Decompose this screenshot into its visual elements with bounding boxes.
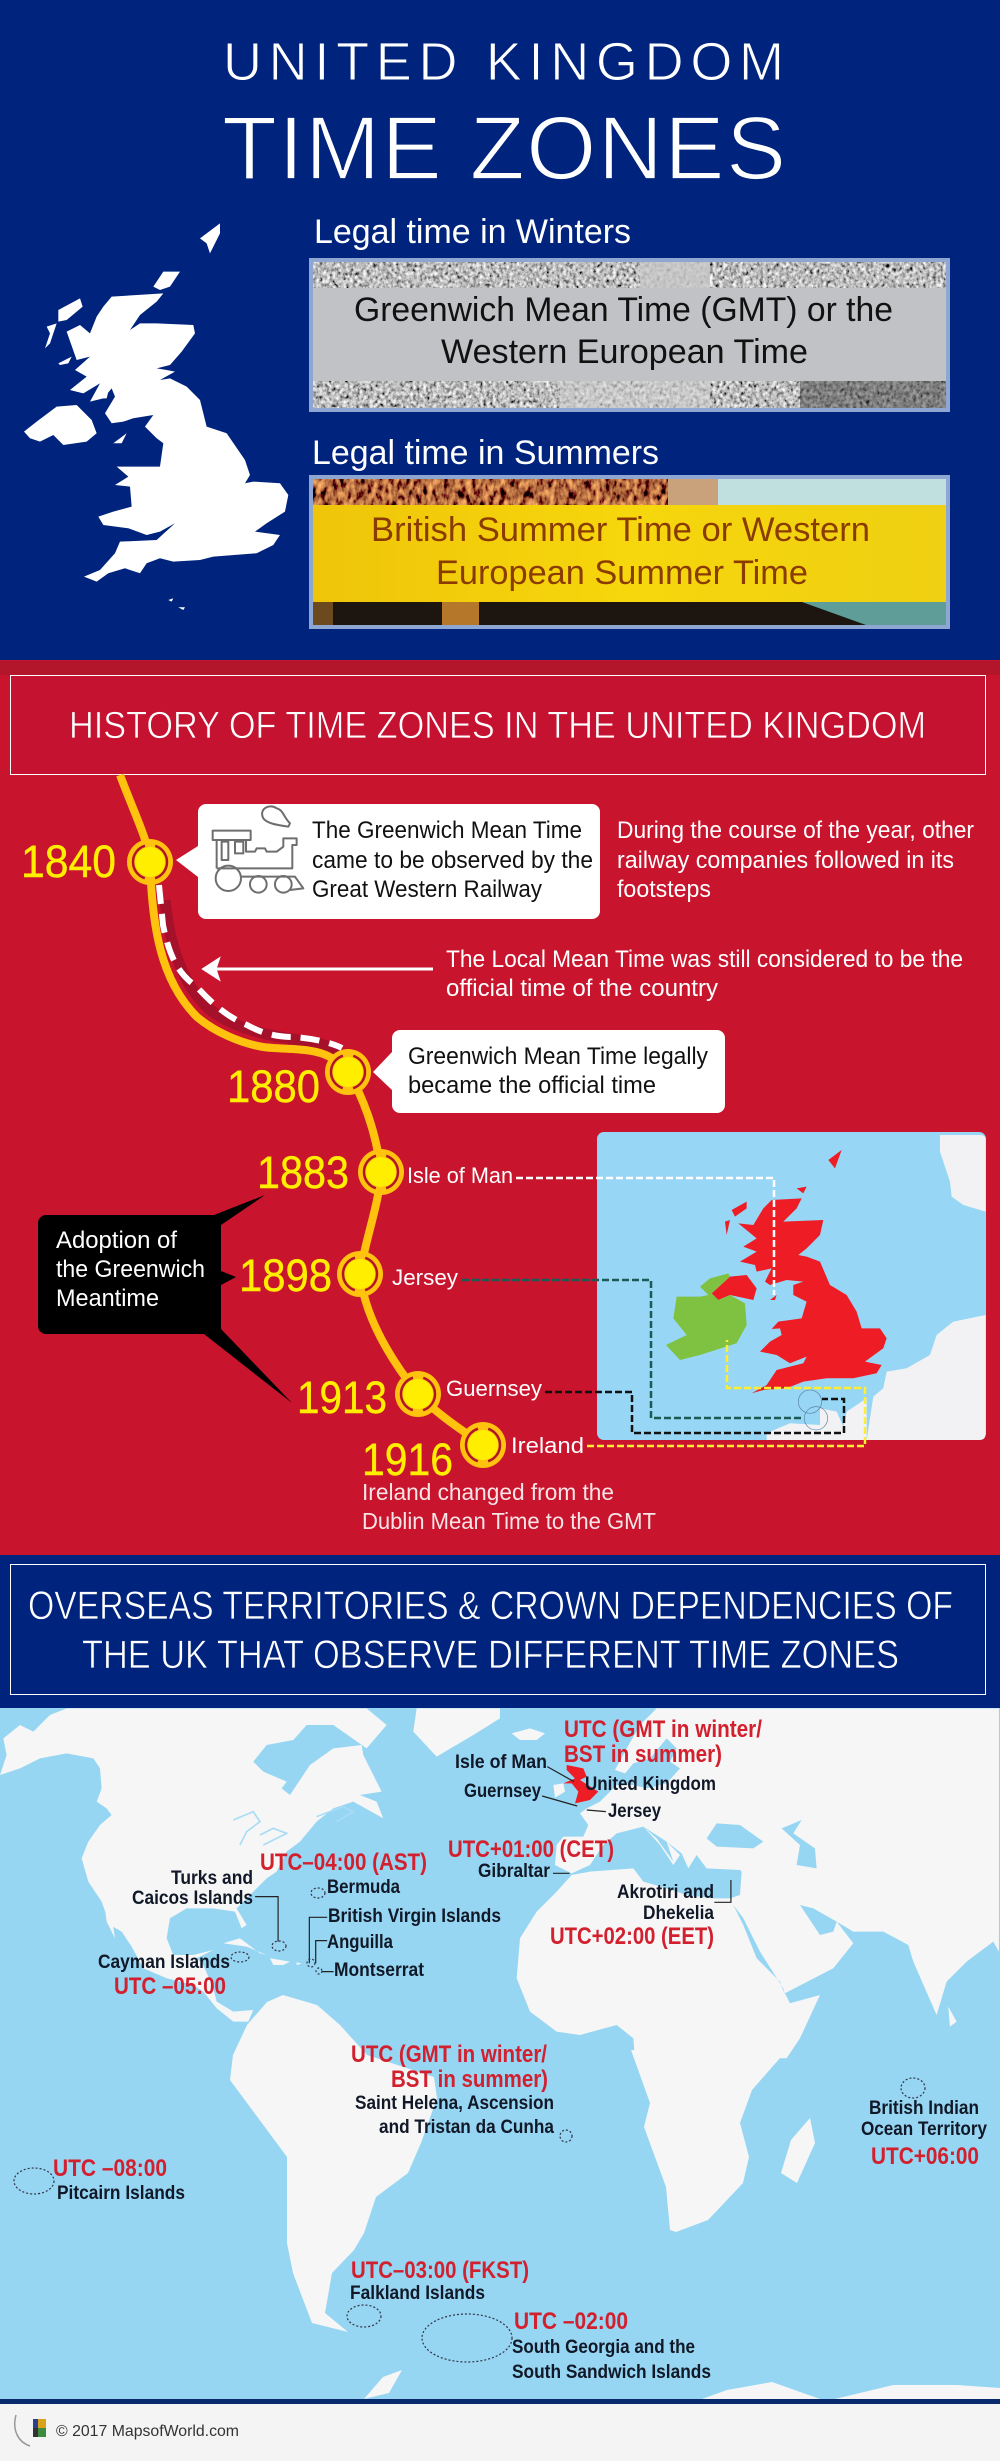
- copyright: © 2017 MapsofWorld.com: [56, 2423, 239, 2440]
- territory labels: United Kingdom: [585, 1774, 716, 1795]
- callout text: The Greenwich Mean Time: [312, 817, 582, 844]
- time zone labels: UTC (GMT in winter/: [564, 1716, 762, 1743]
- time zone labels: UTC –05:00: [114, 1973, 226, 2000]
- callout: adoption: Meantime: [56, 1285, 159, 1312]
- territory labels: Akrotiri and: [617, 1882, 714, 1903]
- text: local mean time: The Local Mean Time was still considered to be the: [446, 946, 963, 973]
- territory labels: Saint Helena, Ascension: [355, 2093, 554, 2114]
- dashed connector lines: [462, 1178, 865, 1446]
- panel: footer: [0, 2399, 1000, 2461]
- territory labels: Ocean Territory: [861, 2119, 987, 2140]
- land: Americas: [0, 1708, 500, 2332]
- time zone labels: UTC –08:00: [53, 2155, 167, 2182]
- timeline nodes: [127, 839, 506, 1468]
- territory labels: Cayman Islands: [98, 1952, 230, 1973]
- territory labels: Isle of Man: [455, 1752, 547, 1773]
- heading: winter: Legal time in Winters: [314, 213, 631, 251]
- territory labels: Turks and: [171, 1868, 253, 1889]
- panel: summer photo box: British Summer Time or Western: [371, 511, 870, 549]
- territory labels: British Indian: [869, 2098, 979, 2119]
- time zone labels: UTC–03:00 (FKST): [351, 2257, 529, 2284]
- year labels: 1840: [21, 836, 116, 887]
- year labels: 1883: [257, 1147, 349, 1198]
- callout: official time: became the official time: [408, 1072, 656, 1099]
- territory labels: Guernsey: [464, 1781, 541, 1802]
- map: world: [0, 1708, 1000, 2399]
- text: other railway companies: [617, 817, 974, 903]
- text: other railway companies: railway companies followed in its: [617, 847, 954, 874]
- year labels: 1913: [297, 1372, 387, 1423]
- time zone labels: UTC –02:00: [514, 2308, 628, 2335]
- territory labels: and Tristan da Cunha: [379, 2117, 554, 2138]
- icon: UK map silhouette: [24, 223, 288, 610]
- leader lines: [255, 1767, 731, 1972]
- callout: adoption: [38, 1195, 292, 1403]
- territory labels: British Virgin Islands: [328, 1906, 501, 1927]
- text: local mean time: [446, 946, 963, 1002]
- territory labels: Falkland Islands: [350, 2283, 485, 2304]
- time zone labels: UTC+01:00 (CET): [448, 1836, 614, 1863]
- territory labels: Gibraltar: [478, 1861, 551, 1882]
- callout: adoption: the Greenwich: [56, 1256, 205, 1283]
- territory labels: Montserrat: [334, 1960, 425, 1981]
- time zone labels: UTC+06:00: [871, 2143, 979, 2170]
- dotted territory markers: [14, 1888, 925, 2362]
- arrow: [204, 960, 433, 978]
- text: local mean time: official time of the country: [446, 975, 718, 1002]
- callout text: came to be observed by the: [312, 847, 593, 874]
- callout: official time: [373, 1030, 725, 1113]
- title: [222, 32, 786, 199]
- time zone labels: UTC+02:00 (EET): [550, 1923, 714, 1950]
- text: other railway companies: footsteps: [617, 876, 711, 903]
- panel: winter photo box: Greenwich Mean Time (GMT) or the: [354, 291, 893, 329]
- text: Ireland note: Ireland changed from the: [362, 1479, 614, 1505]
- title: TIME ZONES: [222, 99, 786, 199]
- labels: adopters: [392, 1163, 584, 1458]
- year labels: 1898: [239, 1250, 332, 1301]
- territory labels: Bermuda: [327, 1877, 400, 1898]
- callout: official time: Greenwich Mean Time legally: [408, 1043, 708, 1070]
- heading: summer: Legal time in Summers: [312, 434, 659, 472]
- year labels: [21, 836, 453, 1485]
- time zone labels: UTC–04:00 (AST): [260, 1849, 427, 1876]
- time zone labels: BST in summer): [564, 1741, 722, 1768]
- time zone labels: [53, 1716, 979, 2335]
- territory labels: Anguilla: [327, 1932, 393, 1953]
- heading: history: [10, 676, 986, 774]
- icon: MapsofWorld logo: [15, 2415, 46, 2446]
- panel: header: [0, 0, 1000, 660]
- heading: history: HISTORY OF TIME ZONES IN THE UNITED KINGDOM: [69, 705, 926, 747]
- territory labels: Pitcairn Islands: [57, 2183, 185, 2204]
- time zone labels: UTC (GMT in winter/: [351, 2041, 547, 2068]
- year labels: 1916: [362, 1434, 453, 1485]
- labels: adopters: Guernsey: [446, 1376, 542, 1401]
- time zone labels: BST in summer): [391, 2066, 548, 2093]
- panel: summer photo box: European Summer Time: [436, 554, 808, 592]
- text: Ireland note: Dublin Mean Time to the GMT: [362, 1508, 656, 1534]
- territory labels: Caicos Islands: [132, 1888, 253, 1909]
- text: Ireland note: [362, 1479, 656, 1534]
- map: British Isles: [597, 1132, 986, 1440]
- icon: locomotive: [213, 806, 303, 893]
- territory labels: [57, 1752, 987, 2383]
- panel: territories heading: [0, 1555, 1000, 1709]
- labels: adopters: Jersey: [392, 1265, 458, 1290]
- title: UNITED KINGDOM: [223, 32, 784, 92]
- territory labels: Dhekelia: [643, 1903, 714, 1924]
- labels: adopters: Isle of Man: [407, 1163, 513, 1188]
- labels: adopters: Ireland: [511, 1433, 584, 1458]
- UK highlight: [563, 1765, 598, 1803]
- territory labels: South Sandwich Islands: [512, 2362, 711, 2383]
- territory labels: Jersey: [608, 1801, 661, 1822]
- timeline track: [120, 775, 483, 1445]
- callout text: Great Western Railway: [312, 876, 542, 903]
- panel: winter photo box: Western European Time: [441, 333, 808, 371]
- land: Europe, Asia and Africa: [364, 1708, 1000, 2399]
- panel: summer photo box: [309, 475, 950, 629]
- year labels: 1880: [227, 1061, 320, 1112]
- callout text: [312, 817, 593, 903]
- panel: history: [0, 660, 1000, 1555]
- territory labels: South Georgia and the: [512, 2337, 695, 2358]
- callout: Great Western Railway: [176, 804, 600, 919]
- text: other railway companies: During the course of the year, other: [617, 817, 974, 844]
- callout: adoption: Adoption of: [56, 1227, 177, 1254]
- panel: winter photo box: [309, 258, 950, 412]
